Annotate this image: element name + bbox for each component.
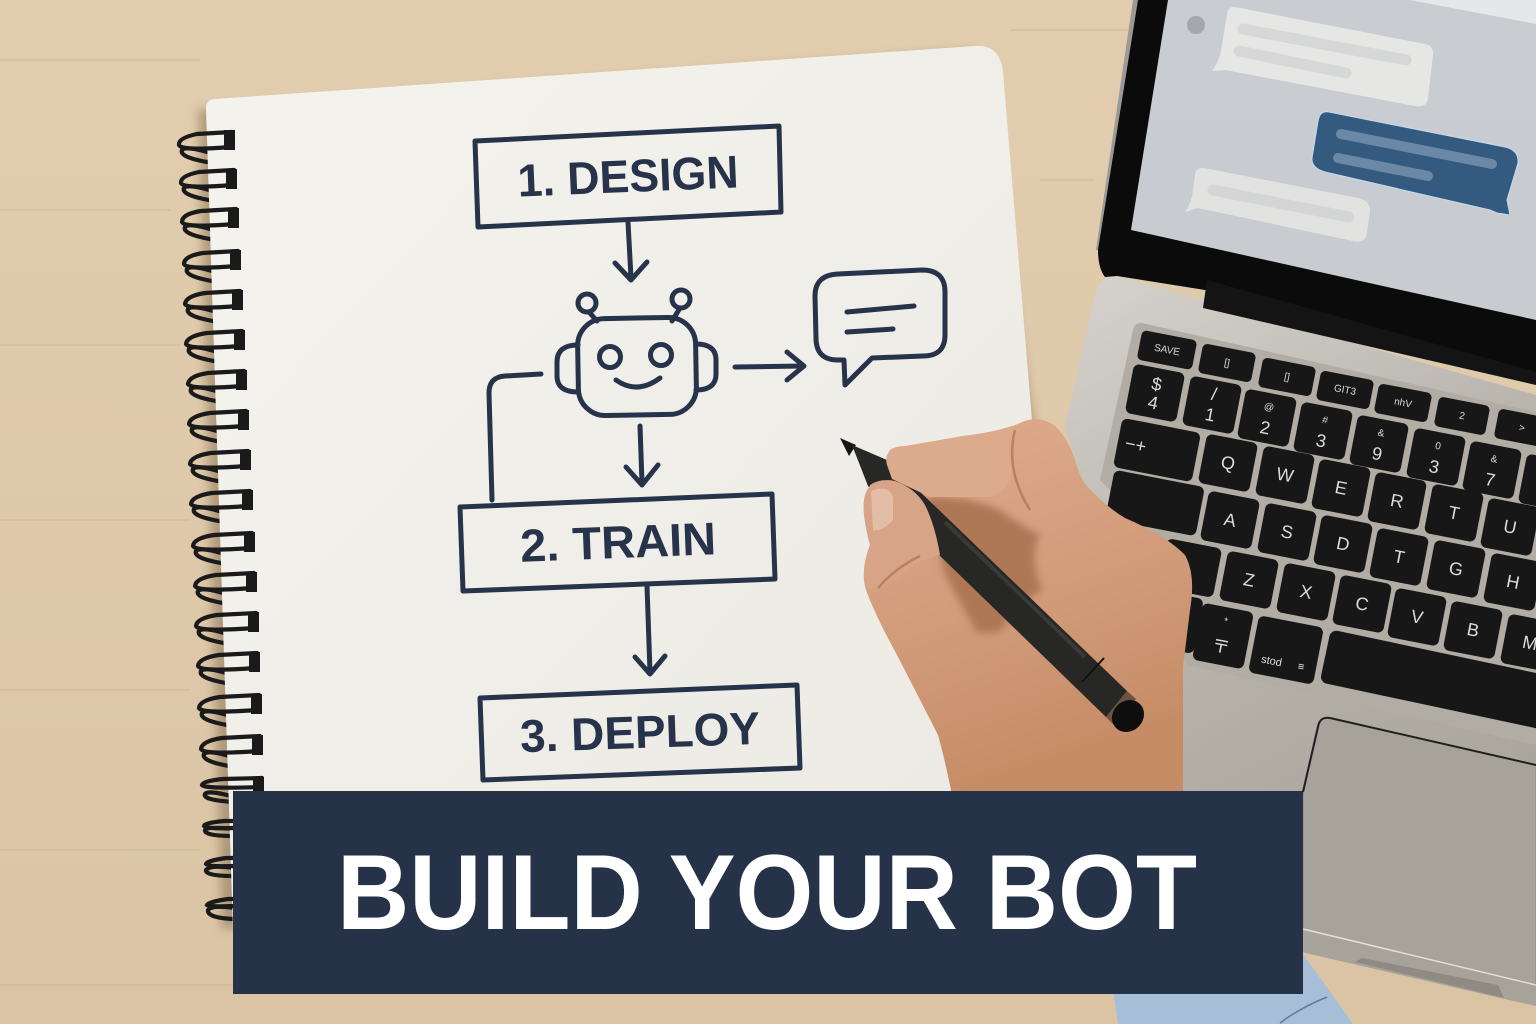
hand holding pen (840, 419, 1192, 795)
spiral binding: front loops with page tabs (179, 130, 264, 906)
screen (1131, 0, 1536, 320)
pen tip (840, 438, 856, 456)
keyboard keys: A (1222, 509, 1238, 531)
keyboard well (1100, 323, 1536, 745)
keyboard keys: U (1502, 516, 1518, 538)
screen top highlight (1410, 0, 1536, 24)
keyboard keys: SAVE (1153, 343, 1181, 358)
trackpad (1303, 718, 1536, 985)
title banner (233, 791, 1303, 994)
keyboard keys: 7 (1483, 469, 1497, 491)
keyboard keys: [] (1223, 358, 1231, 369)
arrow: train to deploy (635, 586, 665, 674)
chat bubble: incoming one (1212, 7, 1433, 106)
keyboard keys (1105, 330, 1536, 745)
title: BUILD YOUR BOT (337, 832, 1197, 952)
keyboard keys: G (1447, 558, 1465, 580)
keyboard keys: 0 (1434, 441, 1442, 453)
keyboard keys: 9 (1370, 443, 1384, 465)
keyboard keys: E (1333, 477, 1349, 499)
keyboard keys: X (1298, 581, 1314, 603)
keyboard keys: GIT3 (1333, 383, 1357, 398)
laptop base (1065, 276, 1536, 1006)
hinge (1203, 280, 1536, 385)
blue shirt sleeve (1113, 950, 1353, 1024)
arrow: robot to speech bubble (735, 352, 804, 380)
pen highlight (945, 522, 1085, 657)
keyboard keys: 4 (1146, 392, 1160, 414)
keyboard keys: B (1465, 619, 1481, 641)
keyboard keys: stod (1260, 654, 1283, 669)
keyboard keys: V (1409, 606, 1425, 628)
thumbnail (871, 489, 893, 530)
spiral binding: rear loops (182, 148, 234, 919)
shadow between fingers (925, 497, 1042, 633)
step 1 box: design (475, 126, 781, 227)
pen end cap (1105, 693, 1151, 739)
keyboard keys: > (1518, 423, 1526, 434)
keyboard keys: & (1377, 428, 1386, 440)
keyboard keys: Q (1219, 452, 1237, 474)
step 3 box: deploy (480, 685, 800, 780)
step 2 box: train (460, 494, 775, 591)
keyboard keys: T (1392, 546, 1406, 568)
keyboard keys: 2 (1458, 411, 1466, 423)
step 1 box: design: 1. DESIGN (517, 145, 739, 207)
keyboard keys: 〒 (1210, 635, 1232, 658)
pen brown ring (1106, 691, 1136, 725)
icon: robot (557, 290, 716, 416)
pen collar line (1082, 658, 1104, 682)
flowchart (460, 126, 945, 780)
keyboard keys: 3 (1314, 430, 1328, 452)
keyboard keys: $ (1150, 373, 1164, 395)
keyboard keys: 2 (1258, 417, 1272, 439)
keyboard keys: ≡ (1297, 661, 1305, 674)
keyboard keys: [] (1283, 372, 1291, 383)
keyboard keys: 3 (1427, 456, 1441, 478)
chat bubble: outgoing blue (1312, 112, 1518, 215)
keyboard keys: R (1389, 490, 1405, 512)
notebook shadow (198, 50, 1035, 930)
keyboard keys: @ (1263, 401, 1275, 414)
laptop (1065, 0, 1536, 1006)
trackpad top edge (1303, 718, 1536, 792)
notebook page (206, 46, 1032, 930)
screen lid edge (1096, 0, 1140, 250)
keyboard keys: # (1321, 415, 1329, 427)
avatar dot (1187, 16, 1205, 34)
icon: speech bubble (815, 270, 945, 385)
thumb (864, 480, 940, 590)
keyboard keys: D (1335, 533, 1351, 555)
index finger (886, 426, 1012, 497)
arrow: design to robot (615, 222, 647, 280)
keyboard keys: & (1490, 454, 1499, 466)
keyboard keys: Z (1242, 569, 1256, 591)
laptop screen bezel (1098, 0, 1536, 382)
chat bubble: incoming two (1185, 168, 1370, 242)
keyboard keys: −+ (1123, 433, 1148, 457)
step 3 box: deploy: 3. DEPLOY (519, 702, 761, 762)
keyboard keys: * (1223, 616, 1229, 628)
base front seam (1303, 929, 1536, 985)
step 2 box: train: 2. TRAIN (519, 512, 717, 572)
keyboard keys: C (1354, 593, 1370, 615)
pen body (852, 445, 1127, 717)
base front notch (1355, 958, 1504, 998)
keyboard keys: nhV (1393, 396, 1413, 411)
keyboard keys: W (1275, 464, 1295, 486)
keyboard keys: T (1447, 502, 1461, 524)
knuckle crease (878, 430, 1030, 588)
keyboard keys: / (1210, 384, 1218, 404)
hand base (864, 419, 1192, 795)
keyboard keys: 1 (1203, 404, 1217, 426)
arrow: feedback loop from train to robot (489, 374, 541, 500)
arrow: robot to train (626, 426, 658, 485)
keyboard keys: H (1505, 571, 1521, 593)
keyboard keys: S (1279, 521, 1295, 543)
